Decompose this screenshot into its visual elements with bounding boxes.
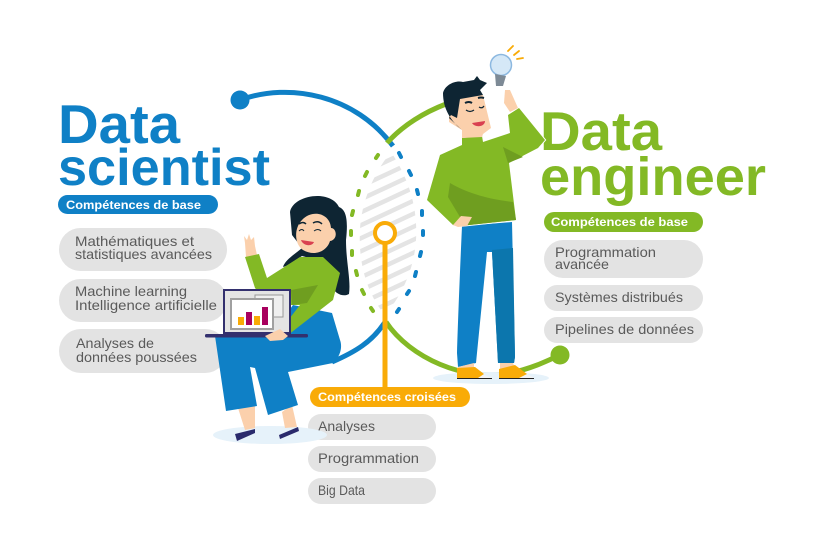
venn arc: data engineer [386,104,570,375]
skill: programming [544,240,703,278]
venn arc: data scientist [230,90,393,362]
skill: machine learning: Machine learning [75,283,187,299]
skill: data analysis: données poussées [76,349,197,365]
heading: Data engineer: Data [540,100,662,162]
connector: shared skills [375,223,395,391]
icon: light bulb [490,46,523,86]
dashed outline: green side [351,155,378,311]
skill: pipelines: Pipelines de données [555,321,694,337]
skill: machine learning [59,279,227,322]
skill: big data: Big Data [318,482,365,498]
label: scientist core skills: Compétences de base [66,198,201,212]
heading: Data scientist [58,93,270,197]
skill: big data [308,478,436,504]
skill: machine learning: Intelligence artificielle [75,297,217,313]
label: scientist core skills [58,195,218,214]
label: shared skills: Compétences croisées [318,390,456,404]
illustration: woman with laptop [205,196,349,444]
skill: data analysis: Analyses de [76,335,154,351]
skill: shared programming [308,446,436,472]
label: engineer core skills [544,212,703,232]
skill: distributed systems: Systèmes distribués [555,289,683,305]
label: engineer core skills: Compétences de base [551,215,688,229]
skill: analysis [308,414,436,440]
skill: shared programming: Programmation [318,450,419,466]
skill: analysis: Analyses [318,418,375,434]
skill: maths: Mathématiques et [75,233,194,249]
skill: data analysis [59,329,227,373]
hatched overlap area [360,156,416,310]
skill: distributed systems [544,285,703,311]
label: shared skills [310,387,470,407]
illustration: man with light bulb [427,76,549,384]
heading: Data scientist: Data [58,93,180,155]
skill: pipelines [544,317,703,343]
heading: Data engineer [540,100,766,207]
skill: maths [59,228,227,271]
skill: programming: avancée [555,256,609,272]
heading: Data engineer: engineer [540,147,766,207]
skill: maths: statistiques avancées [75,246,212,262]
skill: programming: Programmation [555,244,656,260]
dashed outline: blue side [397,153,423,312]
heading: Data scientist: scientist [58,139,270,197]
